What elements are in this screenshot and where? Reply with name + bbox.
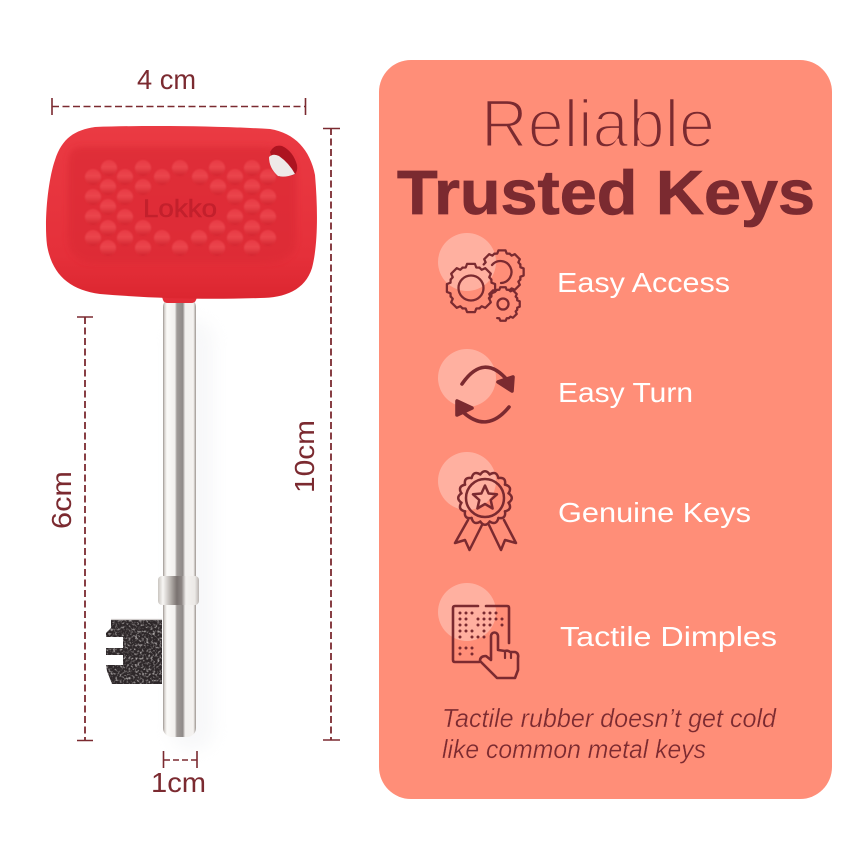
dimension: 4cm width [52, 64, 306, 115]
feature: genuine keys [438, 452, 751, 550]
icon: braille tablet and hand [453, 606, 518, 678]
label: Easy Access [557, 267, 730, 298]
label: Tactile Dimples [560, 621, 777, 652]
key shaft [163, 298, 196, 737]
icon highlight [438, 349, 496, 407]
icon highlight [438, 233, 496, 291]
dimension: 1cm shaft width: 1cm [151, 767, 206, 798]
caption: like common metal keys [442, 734, 706, 764]
feature: tactile dimples [438, 583, 777, 678]
icon: rotate arrows [457, 367, 513, 422]
feature: easy access [438, 233, 730, 321]
icon: gears [447, 250, 524, 321]
label: Easy Turn [558, 377, 693, 408]
key brand: Lokko [143, 195, 217, 223]
heading: Trusted Keys: Trusted Keys [397, 159, 815, 228]
key head recess [68, 147, 296, 263]
icon: award rosette [455, 471, 516, 550]
dimension: 4cm width: 4 cm [137, 64, 196, 95]
dimension: 10cm height: 10cm [289, 420, 320, 493]
heading: Reliable: Reliable [481, 86, 715, 162]
key hole [269, 146, 297, 177]
key shadow [170, 320, 214, 750]
tactile dimples [85, 160, 276, 256]
label: Genuine Keys [558, 497, 751, 528]
photo: red rubber key [46, 126, 317, 750]
key head [46, 126, 317, 299]
dimension: 1cm shaft width [151, 751, 206, 798]
dimension: 10cm height [289, 128, 340, 740]
key collar [158, 576, 199, 605]
icon highlight [438, 583, 496, 641]
panel: features background [379, 60, 832, 799]
caption: Tactile rubber doesn’t get cold [442, 703, 777, 733]
dimension: 6cm shaft length [46, 317, 93, 740]
infographic canvas [46, 60, 832, 799]
caption [442, 703, 777, 764]
dimension: 6cm shaft length: 6cm [46, 471, 77, 529]
feature: easy turn [438, 349, 693, 422]
icon highlight [438, 452, 496, 510]
key stem cap [160, 290, 200, 303]
key bit [106, 618, 162, 684]
